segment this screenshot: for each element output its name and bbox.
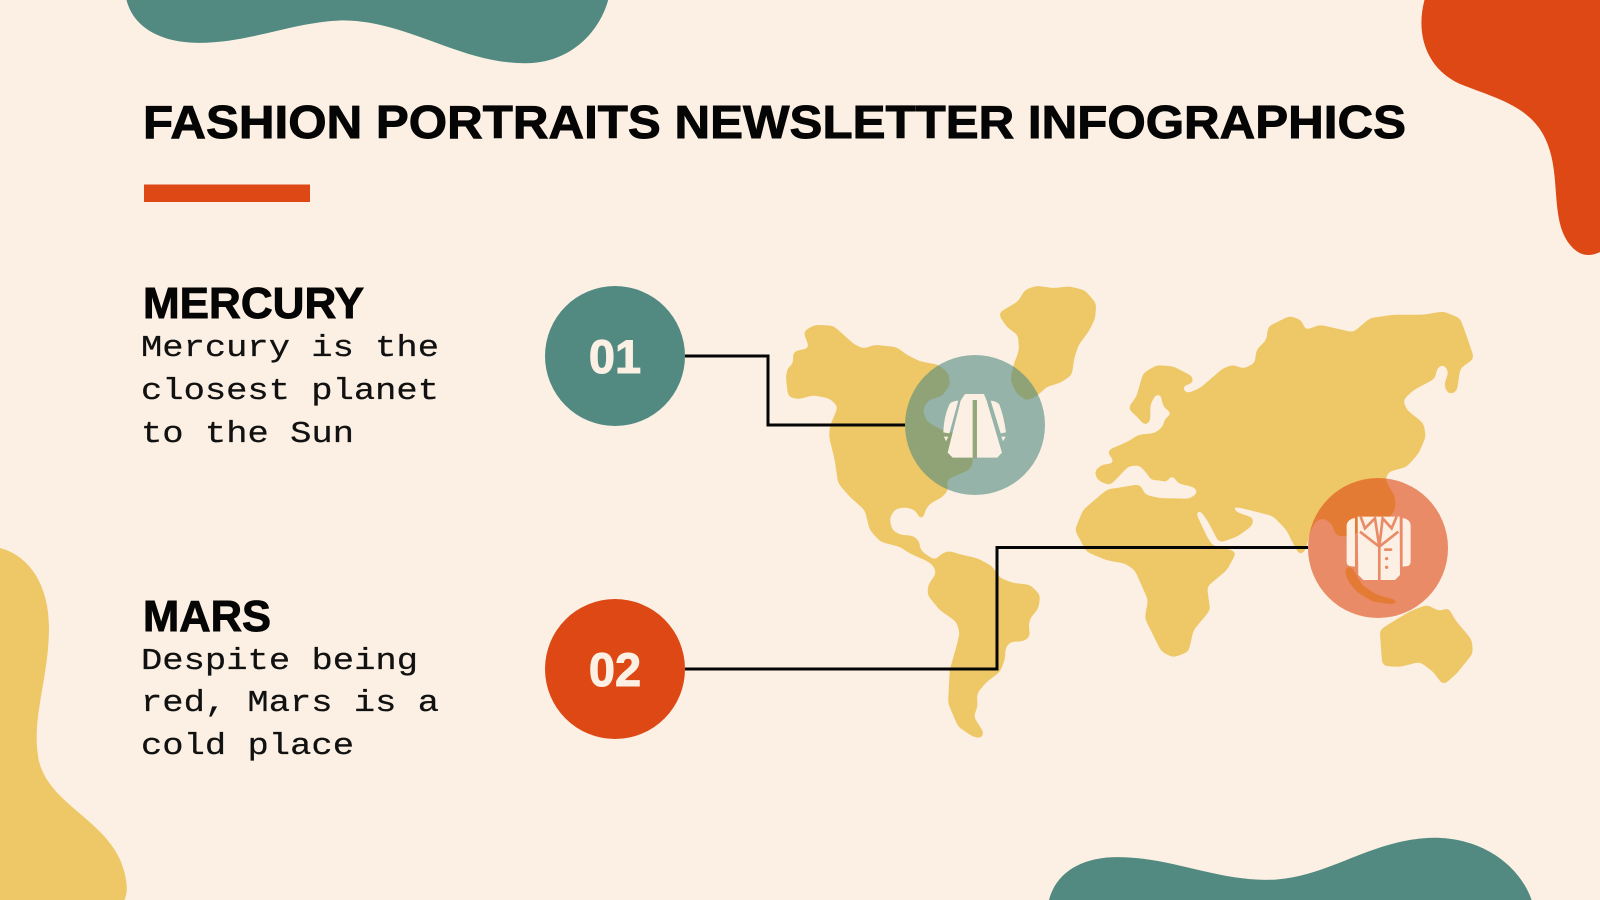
number 02: 02 bbox=[589, 643, 641, 696]
title accent bar bbox=[144, 184, 310, 202]
marker circle 01 bbox=[545, 286, 685, 426]
description: Mars: red, Mars is a bbox=[141, 686, 439, 721]
icon: long coat bbox=[943, 394, 1006, 458]
title: FASHION PORTRAITS NEWSLETTER INFOGRAPHICS bbox=[143, 96, 1406, 148]
connector line 02 bbox=[685, 548, 1308, 669]
marker circle 02 bbox=[545, 599, 685, 739]
world map bbox=[786, 286, 1474, 738]
location circle: America bbox=[905, 355, 1045, 495]
description: Mercury: Mercury is the bbox=[141, 331, 439, 366]
description: Mercury: closest planet bbox=[141, 374, 439, 409]
decorative blob: top right orange bbox=[1421, 0, 1600, 255]
decorative blob: bottom teal bbox=[1049, 838, 1532, 900]
description: Mercury: to the Sun bbox=[141, 417, 354, 452]
description: Mercury bbox=[141, 331, 439, 452]
text block: Mars bbox=[141, 592, 439, 764]
description: Mars: cold place bbox=[141, 729, 354, 764]
connector line 01 bbox=[685, 356, 905, 425]
heading: Mercury: MERCURY bbox=[143, 279, 364, 328]
number 01: 01 bbox=[589, 330, 641, 383]
description: Mars: Despite being bbox=[141, 644, 418, 679]
heading: Mars: MARS bbox=[143, 592, 271, 641]
icon: blazer jacket bbox=[1347, 517, 1411, 580]
text block: Mercury bbox=[141, 279, 439, 452]
description: Mars bbox=[141, 644, 439, 764]
decorative blob: left yellow bbox=[0, 548, 127, 900]
location circle: Asia bbox=[1308, 478, 1448, 618]
decorative blob: top teal bbox=[127, 0, 608, 63]
